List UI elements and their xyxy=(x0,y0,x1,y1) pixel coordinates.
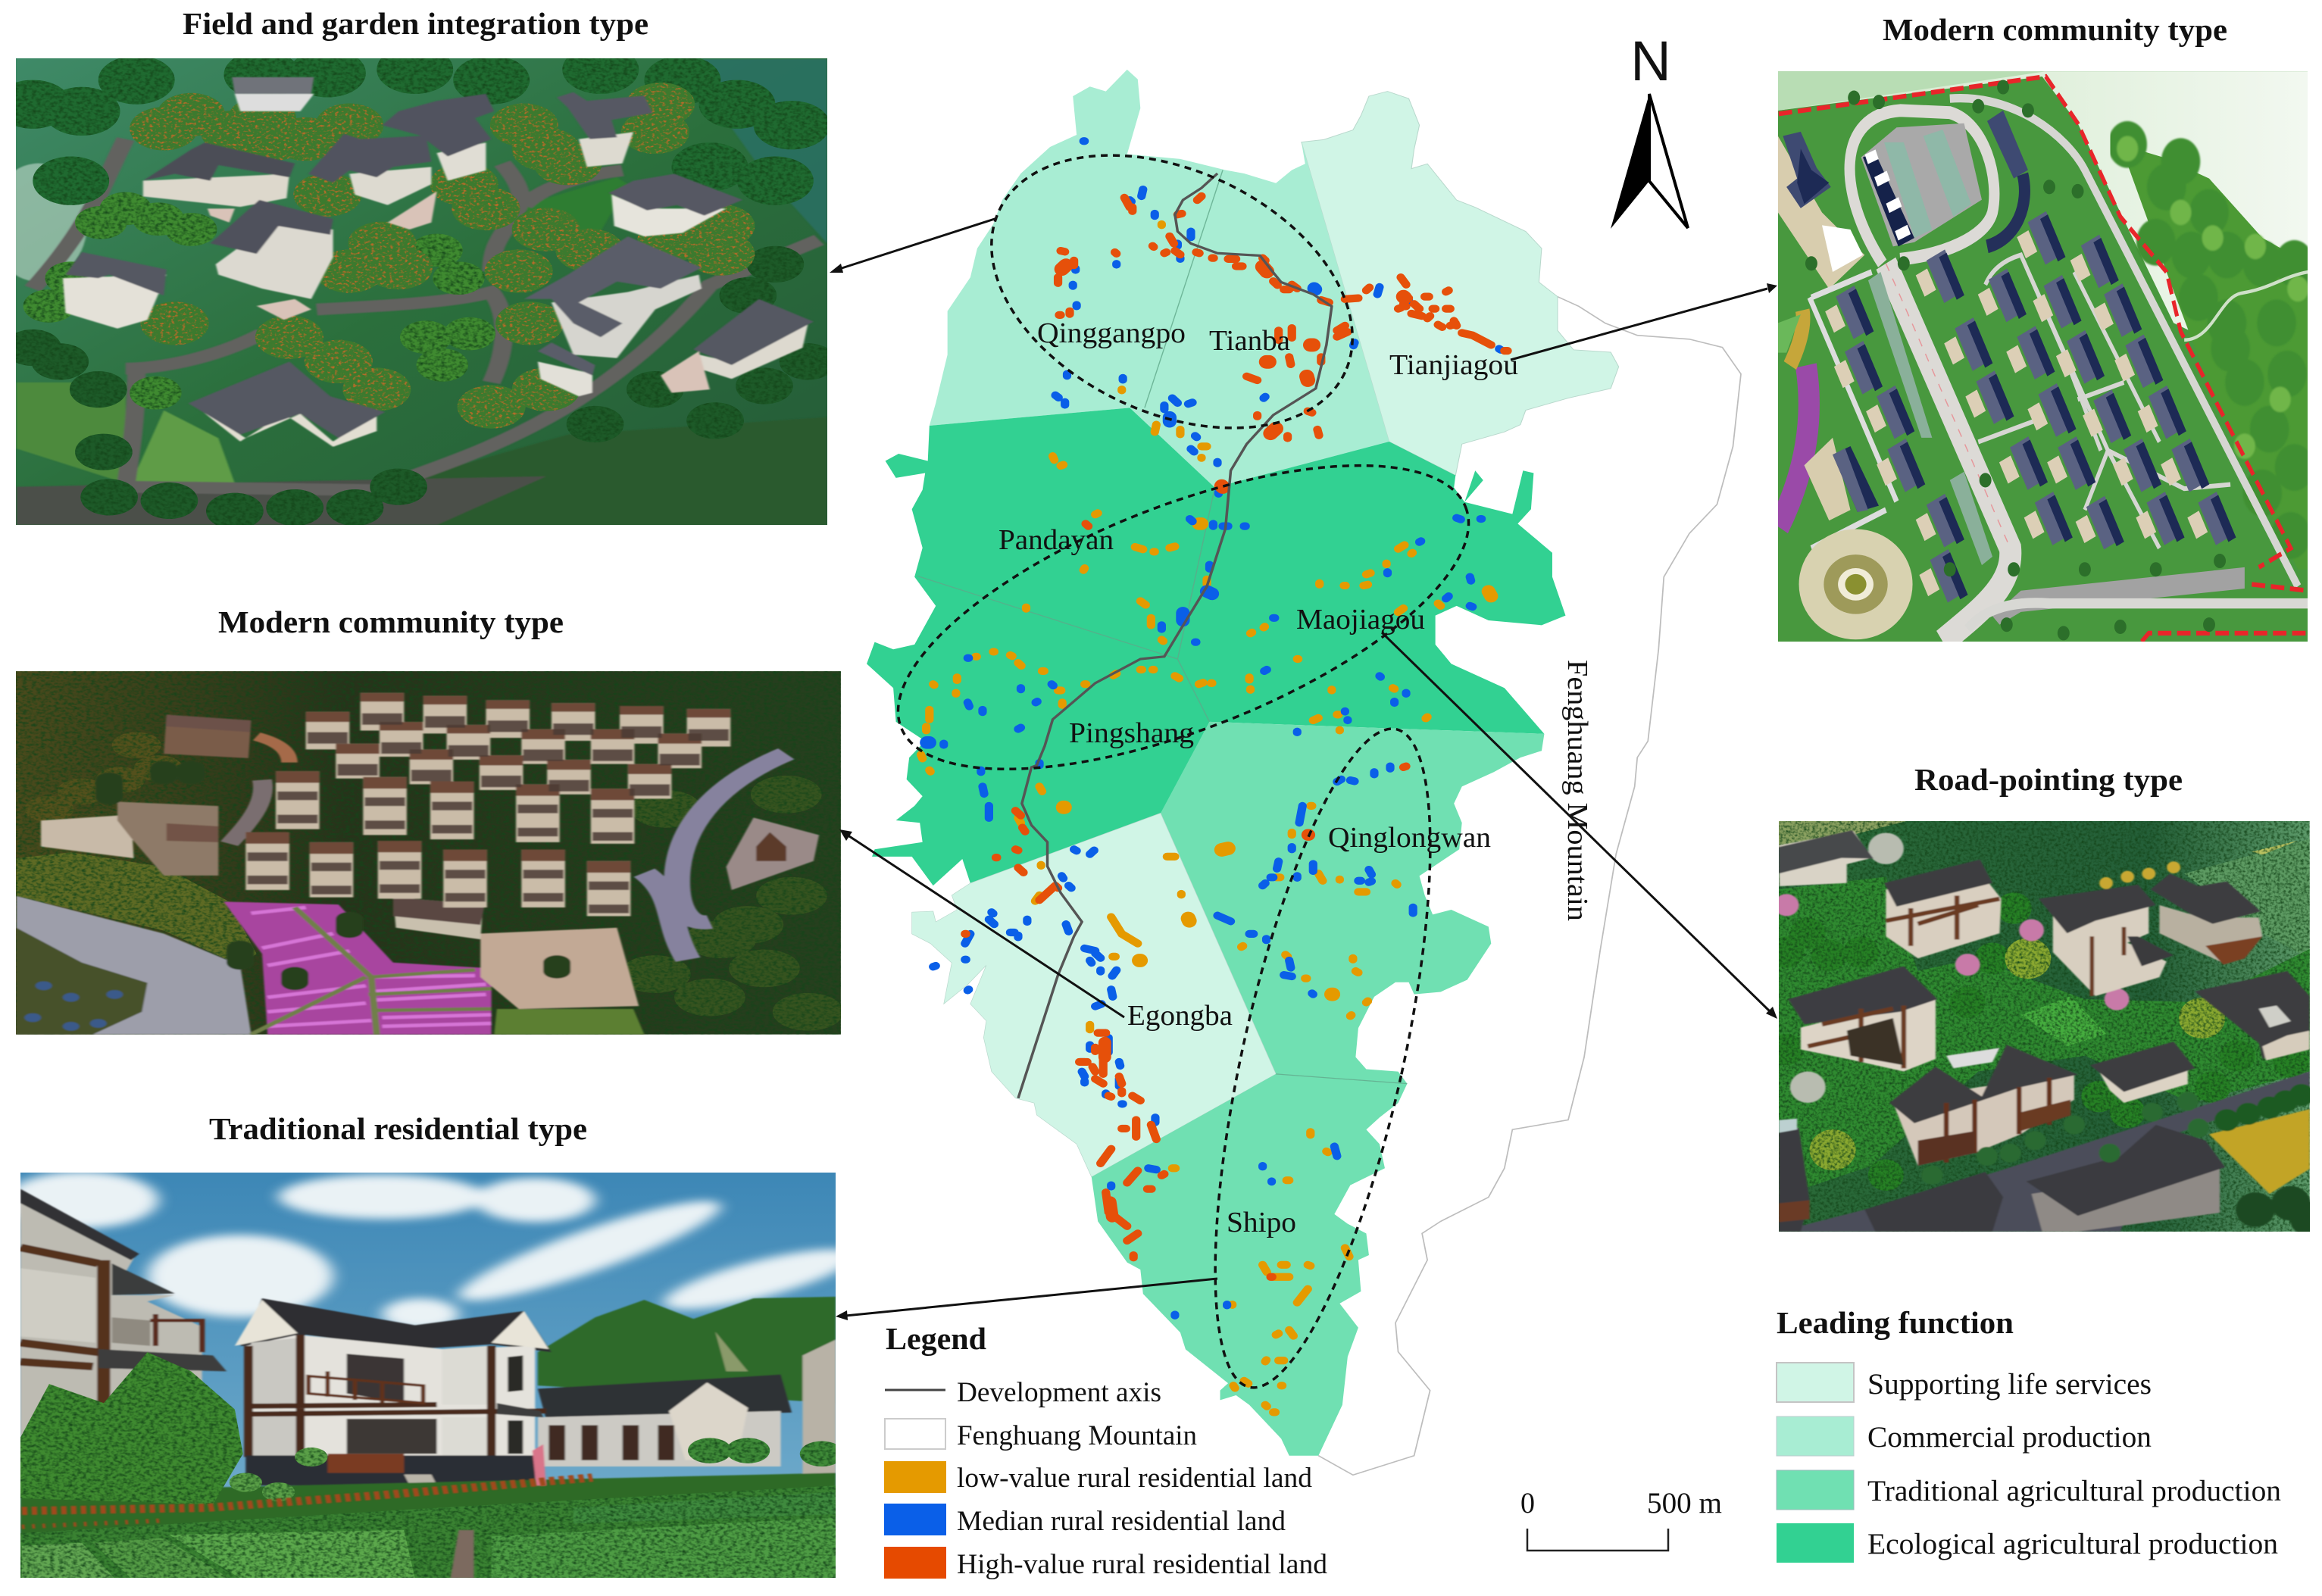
legend row: supporting life services: Supporting life services xyxy=(1867,1368,2152,1401)
arrow: to left modern community photo xyxy=(839,829,1124,1017)
arrow: to field and garden photo xyxy=(830,218,997,273)
dashed ellipse: northern cluster xyxy=(948,101,1396,483)
legend row: low-value land: low-value rural residential land xyxy=(957,1463,1312,1494)
zone: Egongba supporting life services xyxy=(912,813,1276,1177)
dashed ellipse: central cluster xyxy=(861,403,1506,832)
place labels xyxy=(998,317,1518,1238)
arrow: to traditional residential photo xyxy=(836,1279,1217,1320)
north arrow xyxy=(1611,30,1688,229)
legend: leading function: Leading function xyxy=(1777,1305,2014,1340)
arrow: to road-pointing photo xyxy=(1382,632,1777,1019)
place labels: Shipo xyxy=(1227,1207,1296,1238)
legend row: high-value land: High-value rural residential land xyxy=(957,1549,1327,1580)
title: modern community type (left): Modern community type xyxy=(218,604,564,639)
low-value rural residential land patches xyxy=(921,224,1441,772)
legend: map symbols: Legend xyxy=(886,1321,986,1356)
development axis road xyxy=(1018,173,1332,1098)
place labels: Tianjiagou xyxy=(1389,349,1518,381)
legend: leading function xyxy=(1777,1305,2281,1563)
scale bar xyxy=(1520,1487,1722,1551)
legend row: traditional agricultural production xyxy=(1777,1470,2281,1510)
zone: Shipo traditional agricultural production xyxy=(1092,1074,1407,1456)
scale bar: 500 m xyxy=(1647,1487,1722,1519)
photo: modern community site plan xyxy=(1778,71,2308,642)
place labels: Qinglongwan xyxy=(1328,822,1491,854)
legend row: commercial production xyxy=(1777,1416,2152,1456)
legend row: Fenghuang Mountain: Fenghuang Mountain xyxy=(957,1420,1197,1451)
zone: Tianjiagou supporting life services xyxy=(1302,92,1619,476)
photo: modern community village aerial xyxy=(16,671,841,1035)
legend row: supporting life services xyxy=(1777,1363,2152,1402)
title: modern community type (right): Modern community type xyxy=(1883,12,2227,47)
legend row: ecological agricultural production: Ecological agricultural production xyxy=(1867,1528,2278,1560)
zone: Qinglongwan traditional agricultural production xyxy=(1161,722,1544,1084)
title: traditional residential type: Traditional residential type xyxy=(209,1111,587,1146)
map: Fenghuang Mountain outline and leading function zones xyxy=(867,70,1741,1475)
legend row: commercial production: Commercial production xyxy=(1867,1421,2152,1454)
zone: Pandayan, Pingshang and Maojiagou ecological agricultural production xyxy=(867,408,1566,885)
legend row: traditional agricultural production: Traditional agricultural production xyxy=(1867,1475,2281,1507)
title: field and garden integration type: Field and garden integration type xyxy=(183,6,648,41)
place labels: Maojiagou xyxy=(1296,604,1425,636)
place labels: Pingshang xyxy=(1069,717,1194,749)
place labels: Pandayan xyxy=(998,524,1114,556)
north arrow: N xyxy=(1630,30,1671,92)
title: road-pointing type: Road-pointing type xyxy=(1914,762,2183,797)
place labels: Tianba xyxy=(1209,325,1290,357)
rural residential land patches xyxy=(921,141,1508,1412)
dashed ellipse: southern cluster xyxy=(1170,712,1475,1404)
photo: traditional residential house xyxy=(5,1171,866,1579)
vertical label: Fenghuang Mountain: Fenghuang Mountain xyxy=(1561,660,1593,921)
photo: road-pointing type village xyxy=(1779,821,2310,1232)
legend: map symbols xyxy=(884,1321,1327,1580)
place labels: Qinggangpo xyxy=(1037,317,1186,349)
high-value rural residential land patches xyxy=(1058,196,1508,526)
legend row: development axis: Development axis xyxy=(957,1377,1161,1408)
legend row: ecological agricultural production xyxy=(1777,1523,2278,1563)
median rural residential land patches xyxy=(944,141,1501,772)
zone: Qinggangpo and Tianba commercial production xyxy=(930,70,1389,488)
legend row: median land: Median rural residential land xyxy=(957,1506,1286,1537)
arrow: to right modern community photo xyxy=(1511,283,1777,360)
place labels: Egongba xyxy=(1127,1000,1233,1032)
photo: field and garden integration village xyxy=(0,58,827,525)
scale bar: 0 xyxy=(1520,1487,1535,1519)
Fenghuang Mountain boundary xyxy=(1318,297,1741,1475)
